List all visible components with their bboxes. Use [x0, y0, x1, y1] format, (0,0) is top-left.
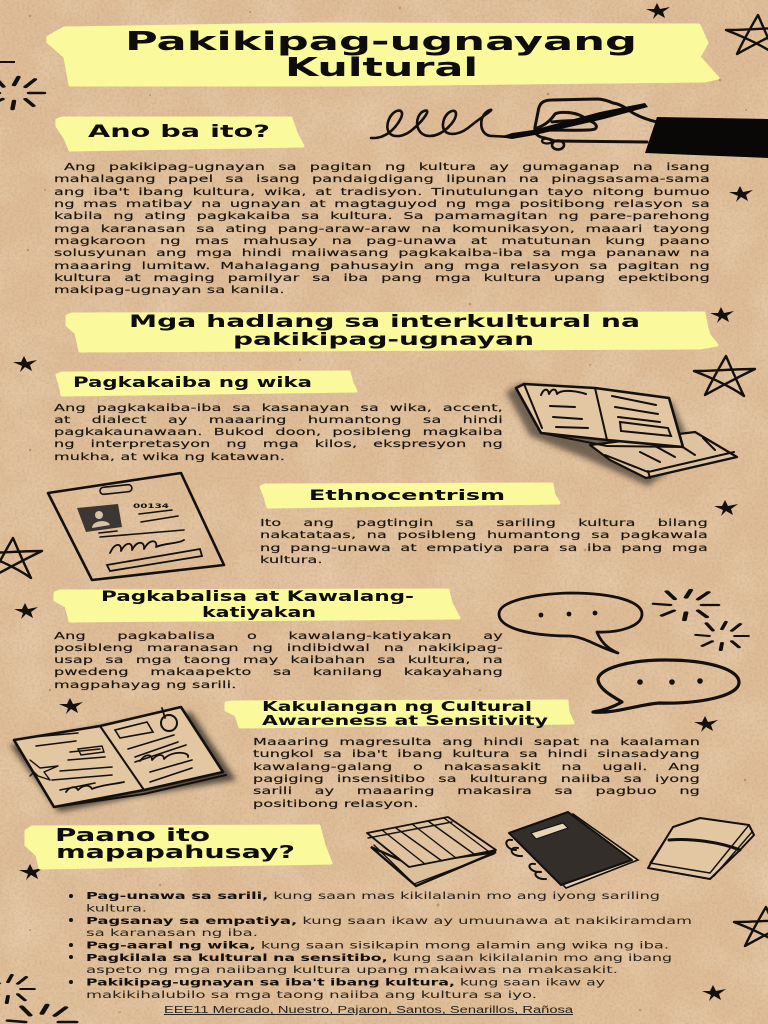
icon: writing pad [367, 817, 496, 886]
heading: Kakulangan [226, 699, 573, 729]
text block: Pagkabalisa: Ang pagkabalisa o kawalang-katiyakan ay [54, 630, 503, 642]
heading: Pagkabalisa [55, 589, 459, 621]
text block: Kakulangan: tungkol sa iba't ibang kultura sa hindi sinasadyang [253, 749, 700, 760]
text block: Kakulangan: positibong relasyon. [253, 799, 419, 810]
text block: intro paragraph: kultura at maging pamilyar sa iba pang mga kultura upang epektibong [54, 273, 710, 284]
text block: intro paragraph: kabila ng ating pagkakaiba sa kultura. Sa pamamagitan ng pare-parehong [54, 211, 710, 222]
icon: speech bubbles [499, 593, 739, 712]
bullet list: aspeto ng mga naiibang kultura upang makaiwas na makasakit. [86, 965, 618, 976]
text block: Kakulangan: pagiging insensitibo sa kulturang naiiba sa iyong [253, 774, 700, 785]
text block: intro paragraph: ng mas matibay na ugnayan at magtaguyod ng mga positibong relasyon sa [54, 199, 710, 210]
text block: intro paragraph: solusyunan ang mga hindi maiiwasang pagkakaiba-iba sa mga pananaw na [54, 248, 710, 259]
text block: Ethnocentrism: kultura. [260, 555, 323, 566]
bullet list [69, 891, 692, 1001]
icon: ID card [48, 473, 224, 580]
text block: Kakulangan: Maaaring magresulta ang hindi sapat na kaalaman [253, 737, 700, 748]
text block: Ethnocentrism [260, 518, 708, 566]
text block: intro paragraph: mga karanasan sa ating pang-araw-araw na komunikasyon, maaari tayong [54, 224, 710, 235]
text block: Pagkakaiba ng wika: Ang pagkakaiba-iba sa kasanayan sa wika, accent, [54, 402, 503, 414]
text block: Kakulangan [253, 737, 700, 810]
icon: strapped journal [648, 818, 754, 879]
heading: Kakulangan: Awareness at Sensitivity [262, 713, 548, 729]
heading: Paano ito mapapahusay: mapapahusay? [56, 842, 295, 863]
icon: hand writing squiggle [371, 99, 768, 158]
heading: Mga hadlang: Mga hadlang sa interkultural na [129, 312, 640, 332]
footer credits: EEE11 Mercado, Nuestro, Pajaron, Santos, Senarillos, Rañosa [164, 1005, 574, 1016]
text block: Ethnocentrism: nakatataas, na posibleng humantong sa pagkawala [260, 530, 708, 541]
text block: intro paragraph: Ang pakikipag-ugnayan sa pagitan ng kultura ay gumaganap na isang [64, 162, 710, 173]
heading: Paano ito mapapahusay [26, 825, 331, 868]
heading: Ano ba ito [57, 118, 303, 150]
text block: intro paragraph: magkaroon ng mas mahusay na pag-unawa at matutunan kung paano [54, 236, 710, 247]
heading: Ethnocentrism: Ethnocentrism [309, 488, 505, 504]
bullet list: Pagkilala sa kultural na sensitibo, kung saan kikilalanin mo ang ibang [86, 953, 672, 964]
heading: Pagkakaiba ng wika: Pagkakaiba ng wika [73, 375, 312, 391]
text block: Pagkabalisa: posibleng maranasan ng indibidwal na nakikipag- [54, 643, 503, 654]
text block: Pagkakaiba ng wika: at dialect ay maaaring humantong sa hindi [54, 415, 503, 426]
title banner [48, 24, 718, 85]
bullet list: makikihalubilo sa mga taong naiiba ang kultura sa iyo. [86, 990, 537, 1001]
text block: Pagkabalisa: usap sa mga taong may kaibahan sa kultura, na [54, 655, 503, 666]
icon: open books [506, 384, 737, 486]
bullet list: Pagsanay sa empatiya, kung saan ikaw ay umuunawa at nakikiramdam [86, 916, 692, 927]
heading: Ethnocentrism [261, 484, 559, 507]
heading: Paano ito mapapahusay: Paano ito [55, 825, 210, 846]
icon: ID card: 00134 [133, 502, 170, 510]
text block: Ethnocentrism: ng pang-unawa at empatiya para sa iba pang mga [260, 543, 708, 554]
text block: Kakulangan: sarili ay maaaring makasira sa pagbuo ng [253, 786, 700, 797]
text block: Pagkabalisa: magpahayag ng sarili. [54, 680, 237, 691]
text block: Ethnocentrism: Ito ang pagtingin sa sariling kultura bilang [260, 518, 708, 529]
icon: spiral notebook [506, 812, 638, 888]
text block: Pagkabalisa [54, 630, 503, 691]
text block: intro paragraph: makipag-ugnayan sa kanila. [54, 285, 285, 296]
text block: Pagkakaiba ng wika [54, 402, 503, 463]
heading: Ano ba ito: Ano ba ito? [88, 122, 270, 142]
heading: Mga hadlang: pakikipag-ugnayan [233, 330, 534, 350]
bullet list: Pakikipag-ugnayan sa iba't ibang kultura, kung saan ikaw ay [86, 978, 605, 988]
bullet list: Pag-aaral ng wika, kung saan sisikapin mong alamin ang wika ng iba. [86, 940, 669, 952]
bullet list: sa karanasan ng iba. [86, 928, 258, 939]
heading: Pagkakaiba ng wika [57, 372, 356, 395]
text block: intro paragraph: ang iba't ibang kultura, wika, at tradisyon. Tinutulungan tayo nitong bumuo [54, 187, 710, 198]
heading: Pagkabalisa: Pagkabalisa at Kawalang- [101, 589, 414, 605]
bullet list: kultura. [86, 904, 147, 914]
text block: Pagkakaiba ng wika: ng interpretasyon ng mga kilos, ekspresyon ng [54, 439, 503, 450]
text block: intro paragraph: mahalagang papel sa isang pandaigdigang lipunan na pinagsasama-sama [54, 174, 710, 185]
heading: Pagkabalisa: katiyakan [202, 605, 316, 621]
text block: Kakulangan: kawalang-galang o nakasasakit na ugali. Ang [253, 762, 700, 773]
text block: Pagkabalisa: pwedeng makaapekto sa kanilang kakayahang [54, 667, 503, 678]
text block: Pagkakaiba ng wika: pagkakaunawaan. Bukod doon, posibleng magkaiba [54, 427, 503, 438]
icon: open notebook [10, 707, 236, 812]
text block: intro paragraph [54, 162, 710, 296]
heading: Mga hadlang [67, 312, 717, 351]
text block: Pagkakaiba ng wika: mukha, at wika ng katawan. [54, 452, 285, 463]
title banner: Kultural [285, 53, 478, 83]
title banner: Pakikipag-ugnayang [125, 27, 637, 57]
text block: intro paragraph: maaaring lumitaw. Mahalagang pahusayin ang mga relasyon sa pagitan ng [54, 261, 710, 272]
heading: Kakulangan: Kakulangan ng Cultural [262, 699, 532, 715]
bullet list: Pag-unawa sa sarili, kung saan mas kikilalanin mo ang iyong sariling [86, 891, 660, 902]
